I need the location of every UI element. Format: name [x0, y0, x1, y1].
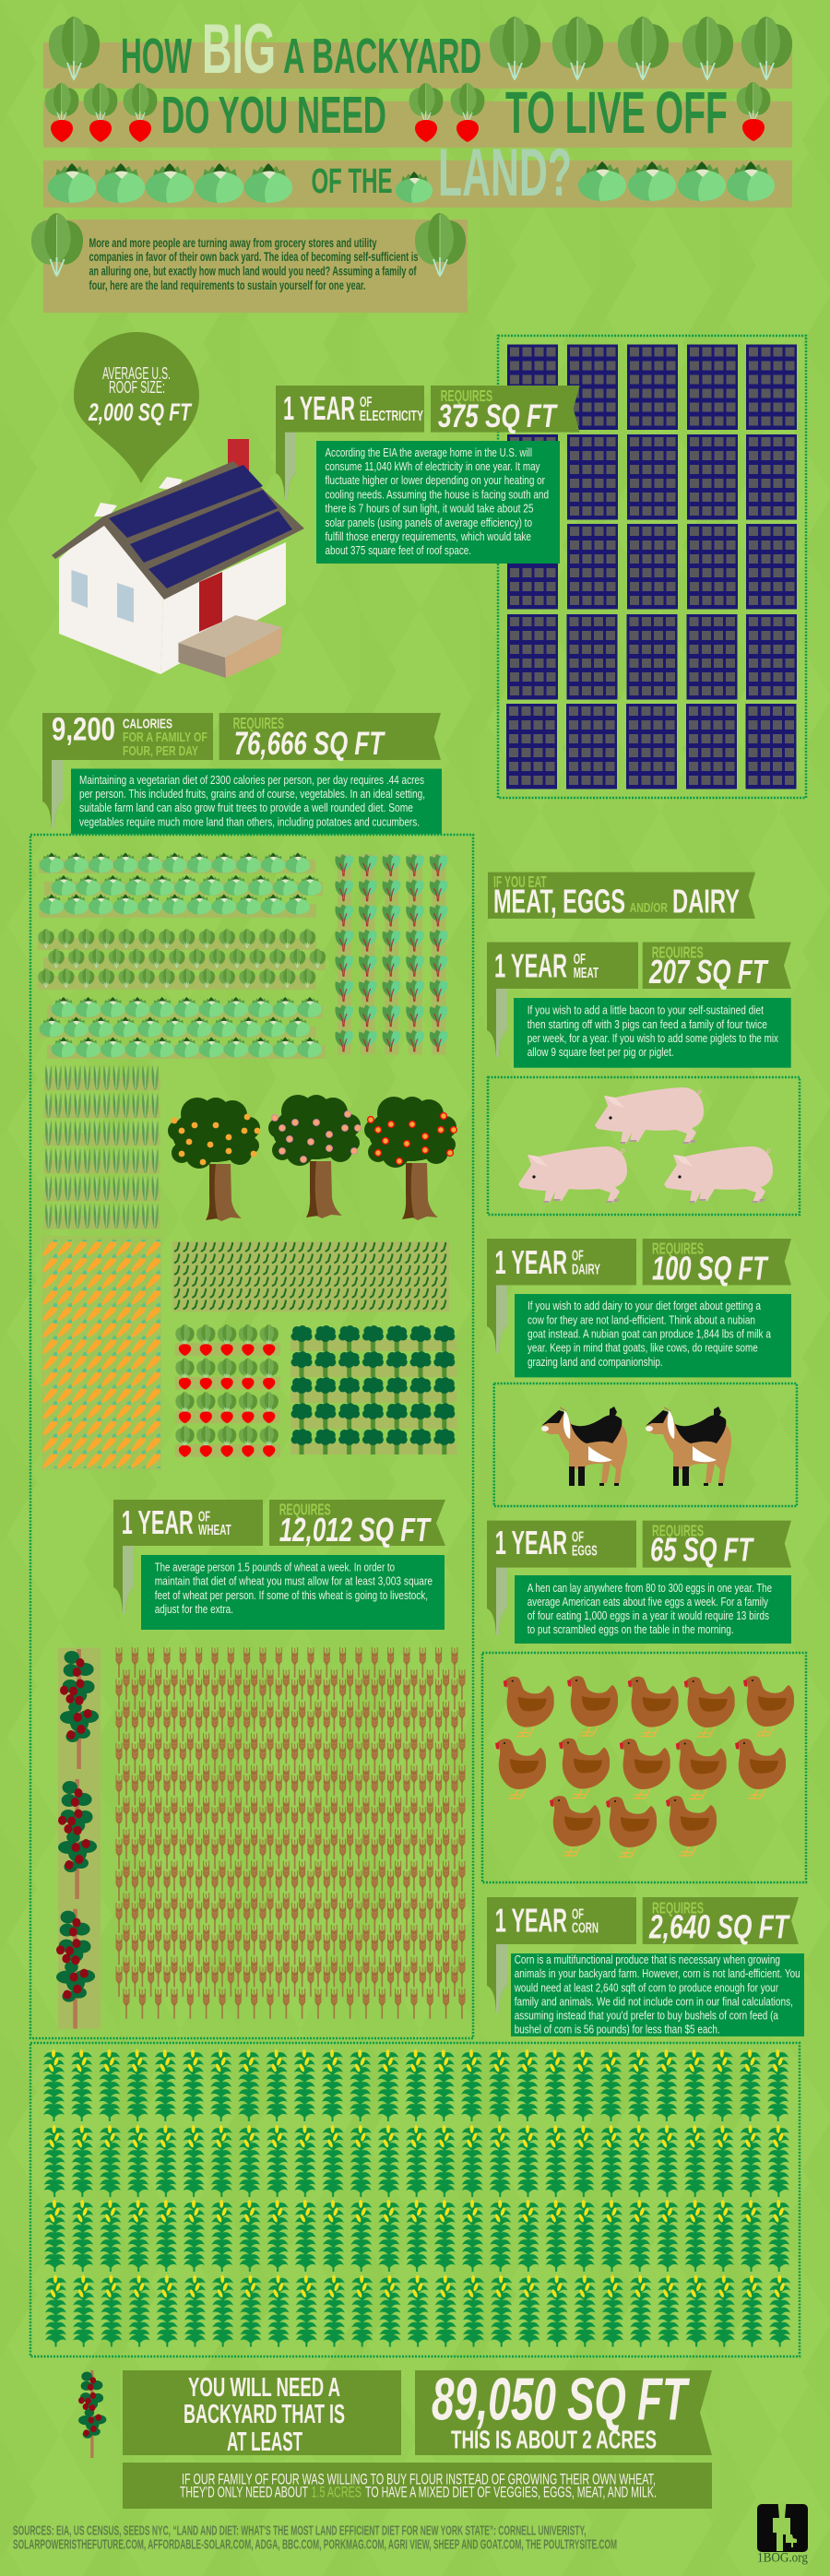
- intro text: companies in favor of their own back yard. The idea of becoming self-sufficient is: [89, 249, 419, 264]
- banner: FOUR, PER DAY: [123, 743, 198, 759]
- flour note: [123, 2463, 712, 2509]
- requirement ribbon: 100 SQ FT: [652, 1250, 769, 1288]
- description: fulfill those energy requirements, which would take: [325, 529, 531, 543]
- description: [515, 1294, 791, 1377]
- heading: meat, eggs and/or dairy: DAIRY: [672, 882, 740, 920]
- requirement ribbon: [643, 1239, 791, 1288]
- heading: meat, eggs and/or dairy: MEAT, EGGS: [493, 882, 625, 920]
- logo: 1BOG: [757, 2502, 808, 2566]
- callout: average roof size: 2,000 SQ FT: [88, 398, 193, 426]
- intro text: four, here are the land requirements to sustain yourself for one year.: [89, 278, 365, 292]
- banner: [487, 1897, 636, 2012]
- panel: introduction: [31, 213, 468, 313]
- pigs pen: [488, 1077, 800, 1215]
- flour note: THEY'D ONLY NEED ABOUT: [180, 2484, 308, 2501]
- intro text: [89, 235, 419, 292]
- soil bands: [43, 42, 792, 208]
- banner: [487, 943, 638, 1057]
- description: adjust for the extra.: [155, 1602, 233, 1616]
- banner: 9,200: [52, 712, 115, 748]
- icon: orange tree: [168, 1098, 260, 1221]
- banner: [42, 712, 213, 828]
- crop: berry bushes: [56, 1648, 101, 2029]
- banner: 1 YEAR: [283, 389, 355, 427]
- you will need box: BACKYARD THAT IS: [184, 2400, 345, 2429]
- panel: eggs: [482, 1521, 806, 1882]
- crop: cabbage lower: [39, 997, 326, 1059]
- description: [514, 998, 791, 1068]
- requirement ribbon: 76,666 SQ FT: [234, 726, 385, 762]
- description: about 375 square feet of roof space.: [325, 543, 471, 557]
- crop: lettuce: [38, 929, 329, 990]
- requirement ribbon: 12,012 SQ FT: [279, 1511, 432, 1549]
- description: Maintaining a vegetarian diet of 2300 calories per person, per day requires .44 acres: [79, 773, 424, 787]
- panel: conclusion: [78, 2366, 712, 2509]
- icon: spinach left: [31, 213, 83, 277]
- description: there is 7 hours of sun light, it would take about 25: [325, 502, 533, 516]
- requirement ribbon: [269, 1500, 445, 1549]
- banner: CORN: [572, 1921, 599, 1937]
- banner: 1 YEAR: [495, 1901, 567, 1939]
- banner: OF: [572, 1249, 584, 1264]
- goats pen: [494, 1383, 797, 1506]
- heading: meat, eggs and/or dairy: IF YOU EAT: [493, 873, 547, 891]
- banner: 1 YEAR: [494, 1243, 567, 1281]
- icon: house with solar roof: [52, 439, 304, 678]
- crop: beets: [335, 854, 453, 1055]
- crop: leeks: [44, 1064, 160, 1230]
- banner: DAIRY: [572, 1262, 600, 1278]
- banner: EGGS: [572, 1544, 598, 1559]
- icon: spinach row: [49, 17, 792, 80]
- icon: apple tree: [364, 1097, 456, 1220]
- heading: meat, eggs and/or dairy: [488, 873, 755, 920]
- icon: radish row: [45, 82, 770, 142]
- title text: LAND?: [438, 136, 572, 210]
- icon: cabbage row: [48, 161, 775, 203]
- banner: OF: [572, 1529, 584, 1546]
- logo: 1BOG: 1BOG.org: [757, 2551, 808, 2566]
- banner: [113, 1500, 263, 1614]
- panel: solar panel field: [498, 336, 806, 798]
- description: [71, 769, 442, 834]
- total ribbon: THIS IS ABOUT 2 ACRES: [451, 2426, 657, 2454]
- heading: meat, eggs and/or dairy: AND/OR: [630, 901, 668, 916]
- banner: 1 YEAR: [494, 946, 567, 985]
- description: fluctuate higher or lower depending on your heating or: [325, 473, 546, 487]
- icon: peach tree: [268, 1095, 361, 1218]
- crop: fruit trees: [168, 1095, 456, 1221]
- panel: meat: [487, 943, 800, 1215]
- requirement ribbon: REQUIRES: [441, 386, 492, 405]
- requirement ribbon: 375 SQ FT: [438, 398, 558, 434]
- requirement ribbon: REQUIRES: [279, 1501, 331, 1519]
- requirement ribbon: [219, 713, 441, 762]
- description: grazing land and companionship.: [528, 1355, 663, 1369]
- description: solar panels (using panels of average efficiency) to: [325, 516, 532, 529]
- title text: DO YOU NEED: [161, 86, 386, 145]
- requirement ribbon: REQUIRES: [652, 1522, 704, 1540]
- crop: radishes: [175, 1324, 280, 1459]
- banner: OF: [572, 1907, 584, 1923]
- requirement ribbon: [643, 943, 791, 991]
- description: feet of wheat per person. If some of this wheat is going to livestock,: [155, 1588, 428, 1602]
- requirement ribbon: REQUIRES: [233, 714, 284, 732]
- title text: OF THE: [312, 162, 393, 201]
- panel: electricity: [276, 386, 580, 564]
- crop: carrots: [42, 1236, 161, 1470]
- description: [515, 1575, 791, 1644]
- description: consume 11,040 kWh of electricity in one year. It may: [325, 459, 540, 473]
- crop: broccoli: [290, 1325, 457, 1454]
- description: maintain that diet of wheat you must allow for at least 3,003 square: [155, 1574, 433, 1588]
- panel: dairy: [487, 1239, 797, 1506]
- requirement ribbon: REQUIRES: [652, 1899, 704, 1917]
- description: [141, 1555, 445, 1630]
- description: vegetables require much more land than others, including potatoes and cucumbers.: [79, 815, 420, 829]
- description: then starting off with 3 pigs can feed a family of four twice: [528, 1017, 767, 1031]
- description: The average person 1.5 pounds of wheat a week. In order to: [155, 1561, 395, 1574]
- hens pen: [482, 1653, 806, 1882]
- description: cooling needs. Assuming the house is facing south and: [325, 487, 549, 502]
- description: to put scrambled eggs on the table in the morning.: [528, 1622, 734, 1636]
- description: per person. This included fruits, grains and of course, vegetables. In an ideal setting,: [79, 787, 425, 801]
- panel: corn: [487, 1897, 804, 2036]
- flour note: 1.5 ACRES: [312, 2484, 362, 2501]
- callout: average roof size: [74, 332, 199, 483]
- banner: OF: [198, 1509, 210, 1525]
- crop: wheat field: [115, 1647, 474, 2021]
- you will need box: AT LEAST: [227, 2428, 302, 2457]
- requirement ribbon: REQUIRES: [652, 943, 704, 961]
- description: According the EIA the average home in the U.S. will: [325, 445, 532, 459]
- banner: 1 YEAR: [122, 1503, 194, 1541]
- panel: vegetarian field border: [30, 835, 473, 2038]
- requirement ribbon: 65 SQ FT: [650, 1531, 754, 1568]
- callout: average roof size: ROOF SIZE:: [109, 378, 165, 397]
- banner: 1 YEAR: [495, 1524, 567, 1561]
- description: allow 9 square feet per pig or piglet.: [528, 1045, 674, 1059]
- requirement ribbon: REQUIRES: [652, 1240, 704, 1258]
- banner: [487, 1239, 636, 1353]
- panel: wheat: [56, 1500, 474, 2029]
- description: bushel of corn is 56 pounds) for less than $5 each.: [515, 2023, 720, 2036]
- you will need box: YOU WILL NEED A: [188, 2373, 340, 2403]
- requirement ribbon: [431, 386, 580, 434]
- flour note: TO HAVE A MIXED DIET OF VEGGIES, EGGS, MEAT, AND MILK.: [365, 2484, 657, 2501]
- title text: [121, 10, 728, 210]
- requirement ribbon: 207 SQ FT: [648, 953, 769, 991]
- description: If you wish to add a little bacon to your self-sustained diet: [528, 1003, 764, 1017]
- banner: OF: [360, 395, 373, 410]
- banner: CALORIES: [123, 716, 172, 732]
- banner: FOR A FAMILY OF: [123, 730, 208, 745]
- callout: average roof size: AVERAGE U.S.: [102, 364, 171, 383]
- panel: calories: [42, 712, 442, 834]
- intro text: More and more people are turning away from grocery stores and utility: [89, 235, 377, 250]
- icon: berry bush: [78, 2370, 106, 2458]
- crop: cucumbers: [172, 1241, 449, 1312]
- description: year. Keep in mind that goats, like cows, do require some: [528, 1341, 758, 1355]
- requirement ribbon: [643, 1897, 799, 1946]
- title panel: [43, 10, 792, 210]
- title text: BIG: [202, 10, 276, 89]
- you will need box: [123, 2370, 401, 2457]
- crop: corn field: [30, 2043, 800, 2356]
- total ribbon: 89,050 SQ FT: [432, 2366, 691, 2433]
- description: suitable farm land can also grow fruit trees to provide a well rounded diet. Some: [79, 801, 413, 814]
- total ribbon: [415, 2366, 712, 2455]
- title text: A BACKYARD: [283, 29, 481, 84]
- banner: [487, 1521, 636, 1635]
- description: [316, 441, 560, 564]
- banner: [276, 386, 424, 500]
- icon: spinach right: [415, 213, 466, 277]
- description: If you wish to add dairy to your diet forget about getting a: [528, 1299, 762, 1312]
- crop: cabbage top: [39, 852, 323, 918]
- banner: WHEAT: [198, 1523, 231, 1538]
- intro text: an alluring one, but exactly how much land would you need? Assuming a family of: [89, 264, 417, 279]
- banner: ELECTRICITY: [360, 409, 423, 424]
- description: [511, 1953, 804, 2036]
- description: cow for they are not land-efficient. Think about a nubian: [528, 1312, 755, 1326]
- sources: [13, 2523, 617, 2553]
- title text: HOW: [121, 29, 192, 84]
- banner: OF: [574, 952, 586, 967]
- banner: MEAT: [574, 966, 599, 981]
